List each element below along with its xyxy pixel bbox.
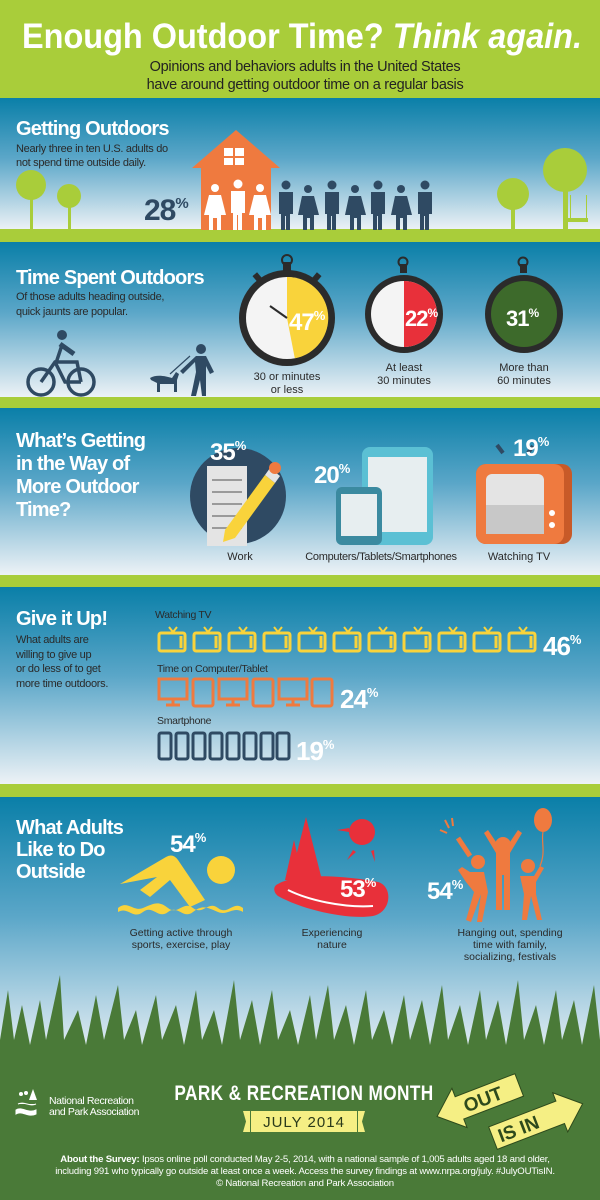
text block: more time outdoors. — [16, 678, 108, 690]
icon: swimmer: % — [195, 830, 207, 845]
stat 19%: 19 — [296, 736, 323, 766]
panel: time spent outdoors — [0, 242, 600, 397]
icon: people celebrating: 54 — [427, 878, 452, 905]
icon: nature — [274, 817, 388, 917]
heading: More Outdoor — [16, 476, 140, 498]
logo: NRPA: and Park Association — [49, 1106, 140, 1118]
icon: work: 35 — [210, 439, 235, 466]
icon: trees left — [16, 170, 81, 230]
stopwatch: 22%: 22 — [405, 306, 427, 331]
stopwatch: 22%: 30 minutes — [377, 375, 431, 387]
title band — [0, 0, 600, 98]
title: Enough Outdoor Time? Think again. — [22, 17, 582, 56]
label: Work — [227, 551, 253, 563]
icon: swimmer — [118, 830, 243, 915]
icon: work: % — [235, 438, 247, 453]
stat 24%: % — [367, 685, 379, 700]
labels: nature — [317, 939, 347, 951]
heading: What’s Getting — [16, 430, 145, 452]
text block: willing to give up — [15, 649, 91, 661]
panel: obstacles — [0, 408, 600, 575]
stopwatch: 47% — [239, 255, 335, 396]
stopwatch: 47%: or less — [271, 384, 304, 396]
subtitle: Opinions and behaviors adults in the United States — [150, 59, 460, 75]
logo: NRPA: National Recreation — [49, 1095, 134, 1107]
footer with grass — [0, 975, 600, 1200]
icon: trees right — [497, 148, 588, 230]
icon: people celebrating: % — [452, 877, 464, 892]
icon: nature: 53 — [340, 876, 365, 903]
stat 24%: 24 — [340, 684, 367, 714]
text block: about the survey: including 991 who typically go outside at least once a week. Access the survey findings at www.nrpa.org/july. #JulyOUTisIN. — [55, 1166, 555, 1177]
icon: people row — [279, 180, 432, 230]
icon row: computers — [159, 679, 332, 706]
panel: time spent outdoors: quick jaunts are popular. — [16, 306, 128, 318]
label: Computers/Tablets/Smartphones — [305, 551, 458, 563]
text block: about the survey: © National Recreation and Park Association — [216, 1178, 394, 1189]
icon: work — [190, 438, 286, 563]
icon: out is in arrows: IS IN — [495, 1112, 542, 1147]
icon: out is in arrows: OUT — [461, 1083, 506, 1117]
labels: sports, exercise, play — [132, 939, 231, 951]
banner: july 2014: JULY 2014 — [263, 1114, 345, 1131]
stat 46%: % — [570, 632, 582, 647]
label: smartphone: Smartphone — [157, 715, 212, 727]
title band: have around getting outdoor time on a regular basis — [147, 77, 463, 93]
text block: about the survey: About the Survey: Ipsos online poll conducted May 2-5, 2014, with a national sample of 1,005 adults aged 18 and older, — [60, 1154, 550, 1165]
labels: time with family, — [473, 939, 547, 951]
icon: nature: % — [365, 875, 377, 890]
icon: swimmer: 54 — [170, 831, 195, 858]
text block: about the survey — [55, 1154, 555, 1189]
panel: give it up — [0, 587, 600, 784]
label: Watching TV — [488, 551, 551, 563]
stat 46%: 46 — [543, 631, 570, 661]
panel: what adults like — [0, 797, 600, 1060]
heading: Time Spent Outdoors — [16, 267, 204, 289]
heading: Give it Up! — [16, 608, 107, 630]
text block: Of those adults heading outside, — [16, 291, 164, 303]
panel: getting outdoors: not spend time outside daily. — [16, 157, 146, 169]
text block: or do less of to get — [16, 663, 101, 675]
label: computer: Time on Computer/Tablet — [157, 663, 268, 675]
icon: tv: % — [538, 434, 550, 449]
panel: getting outdoors — [0, 98, 600, 242]
stopwatch: 31%: 60 minutes — [497, 375, 551, 387]
heading: park & recreation month: PARK & RECREATION MONTH — [174, 1083, 434, 1105]
stat 28%: 28 — [144, 194, 175, 227]
icon row: tvs — [159, 627, 535, 651]
stopwatch: 31%: % — [528, 306, 539, 320]
icon: devices: 20 — [314, 462, 339, 489]
label: 30 or minutes — [254, 371, 321, 383]
stopwatch: 31% — [485, 258, 563, 387]
icon: dog walker — [150, 344, 214, 396]
text block: What adults are — [16, 634, 89, 646]
stopwatch: 22% — [365, 258, 443, 387]
icon: out is in arrows — [430, 1065, 590, 1158]
icon: tv — [476, 434, 572, 563]
heading: Like to Do — [16, 839, 105, 861]
icon row: phones — [159, 733, 289, 759]
text block: Nearly three in ten U.S. adults do — [16, 143, 168, 155]
icon: cyclist — [28, 330, 94, 395]
heading: Outside — [16, 861, 86, 883]
label: At least — [386, 362, 422, 374]
heading: Time? — [16, 499, 71, 521]
heading: in the Way of — [16, 453, 130, 475]
stopwatch: 31%: 31 — [506, 306, 528, 331]
labels: socializing, festivals — [464, 951, 556, 963]
icon: tv: 19 — [513, 435, 538, 462]
logo: NRPA — [16, 1089, 140, 1118]
icon: devices — [305, 447, 458, 563]
banner: july 2014 — [243, 1111, 365, 1132]
stat 19%: % — [323, 737, 335, 752]
heading: What Adults — [16, 817, 124, 839]
label: watching tv: Watching TV — [155, 609, 212, 621]
labels — [130, 927, 563, 963]
stat 28%: % — [175, 195, 188, 212]
labels: Experiencing — [302, 927, 363, 939]
stopwatch: 22%: % — [427, 306, 438, 320]
stopwatch: 47%: % — [314, 308, 326, 323]
heading: Getting Outdoors — [16, 118, 169, 140]
icon: devices: % — [339, 461, 351, 476]
stopwatch: 47%: 47 — [289, 309, 314, 336]
labels: Getting active through — [130, 927, 233, 939]
icon: people celebrating — [427, 808, 552, 922]
labels: Hanging out, spending — [457, 927, 563, 939]
icon: house with people — [192, 130, 280, 230]
label: More than — [499, 362, 549, 374]
